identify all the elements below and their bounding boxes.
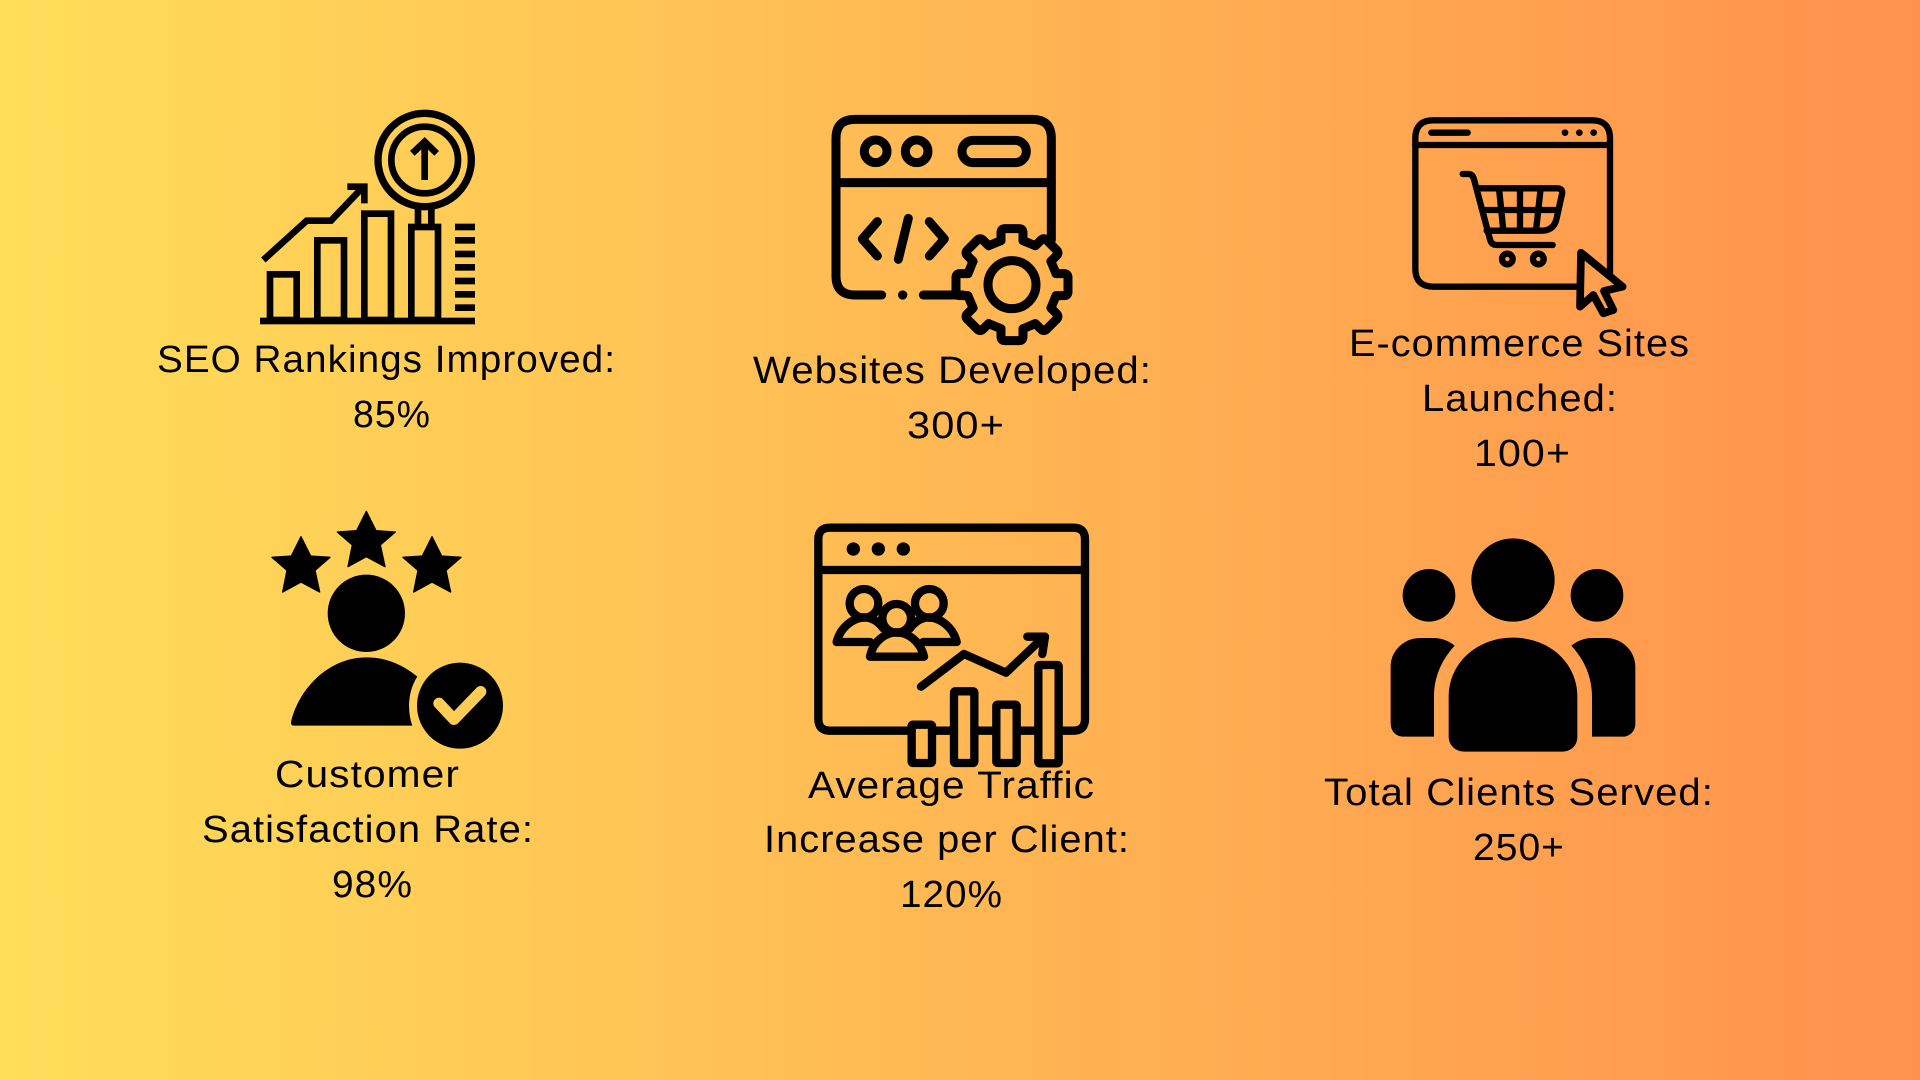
panel: websites developed bbox=[753, 119, 1152, 447]
label: SEO Rankings Improved: SEO Rankings Improved: bbox=[157, 339, 616, 381]
label: Customer Satisfaction Rate: Customer bbox=[275, 754, 460, 796]
icon: person with stars and check badge bbox=[272, 511, 503, 749]
value: 250+: 250+ bbox=[1473, 827, 1565, 869]
label: Total Clients Served: Total Clients Served: bbox=[1324, 772, 1714, 814]
icon: browser window with code and gear bbox=[836, 119, 1068, 341]
label: Average Traffic Increase: Average Traffic bbox=[808, 765, 1095, 807]
panel: e-commerce sites launched bbox=[1349, 120, 1690, 475]
value: 120%: 120% bbox=[900, 874, 1003, 916]
icon: bar chart with magnifier bbox=[260, 113, 475, 324]
panel: total clients served bbox=[1324, 538, 1714, 869]
icon: browser window with shopping cart and cursor bbox=[1415, 120, 1623, 313]
icon: browser window with audience and growth chart bbox=[818, 528, 1085, 763]
label line 2: Increase per Client: bbox=[764, 819, 1130, 861]
label line 2: Launched: bbox=[1422, 378, 1618, 420]
icon: group of three people bbox=[1391, 538, 1635, 752]
panel: SEO rankings improved bbox=[157, 113, 616, 436]
value: 300+: 300+ bbox=[907, 405, 1005, 447]
label: Websites Developed: Websites Developed: bbox=[753, 350, 1152, 392]
value: 85%: 85% bbox=[353, 394, 431, 436]
panel: average traffic increase bbox=[764, 528, 1130, 916]
label line 2: Satisfaction Rate: bbox=[202, 809, 534, 851]
label: E-commerce Sites Launched: E-commerce Sites bbox=[1349, 323, 1690, 365]
value: 100+: 100+ bbox=[1474, 433, 1571, 475]
value: 98%: 98% bbox=[332, 864, 413, 906]
panel: customer satisfaction rate bbox=[202, 511, 534, 906]
